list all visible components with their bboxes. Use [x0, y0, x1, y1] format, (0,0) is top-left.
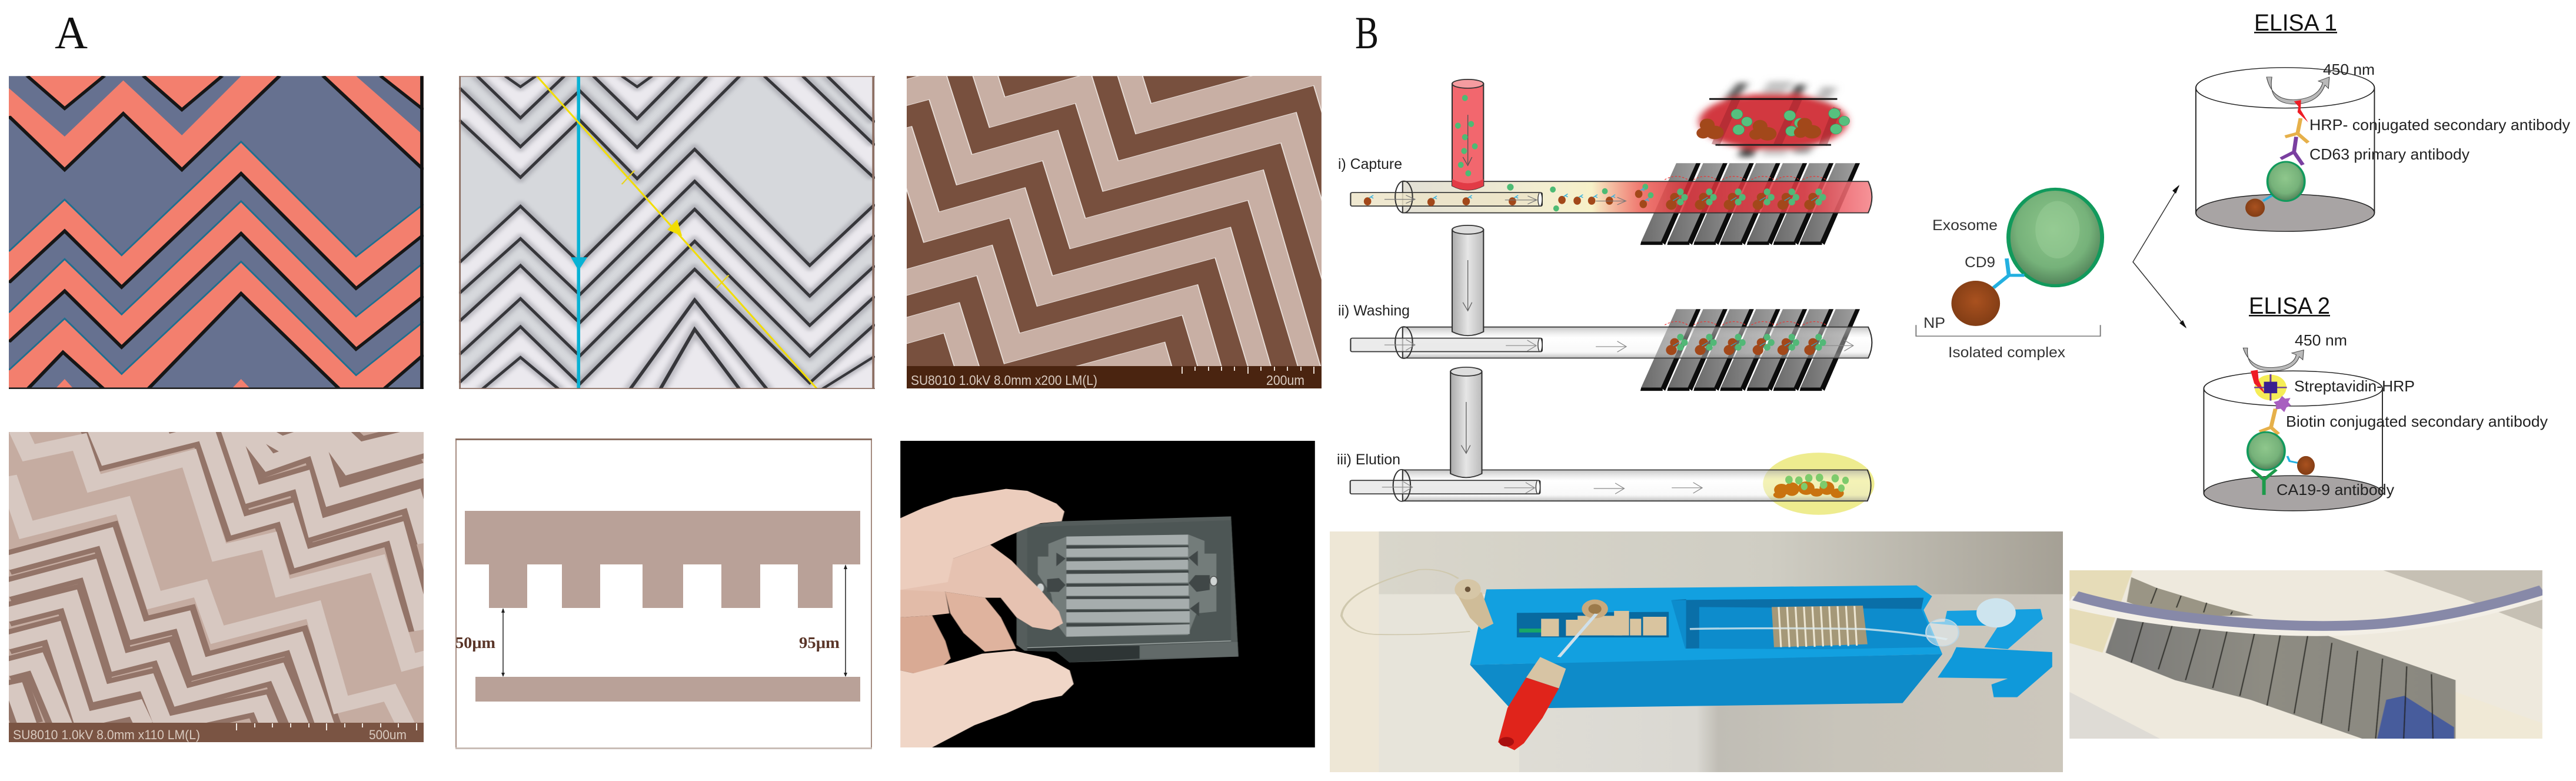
- dimension: 50 micrometre gap: 50μm: [455, 634, 496, 652]
- panel: photo of blue 3D-printed magnet holder: [1330, 531, 2063, 772]
- step labels: iii) Elution: [1337, 451, 1400, 468]
- diagram: ELISA 2 well: 450 nm: [2295, 331, 2347, 349]
- step labels: ii) Washing: [1338, 303, 1410, 319]
- tubing: [2069, 590, 2542, 630]
- panel: coloured optical micrograph of chevrons: [9, 76, 424, 389]
- dimension: 95 micrometre gap: [799, 564, 847, 677]
- heading: ELISA 1: ELISA 1: [2254, 10, 2337, 36]
- lower slab: [475, 677, 860, 702]
- magnet strips: [2106, 577, 2455, 739]
- back fingers: [900, 592, 1016, 673]
- panel: close-up photo of tubing on magnets: [2069, 570, 2542, 739]
- dimension: 50 micrometre gap: [455, 608, 505, 677]
- tubing loop: [1342, 569, 1470, 634]
- arrows: branching to ELISA 1 and ELISA 2: [2133, 185, 2186, 328]
- step labels: i) Capture: [1338, 156, 1402, 172]
- chip: [1017, 516, 1239, 663]
- diagram: isolated exosome complex: Isolated complex: [1948, 344, 2066, 361]
- diagram: ELISA 2 well: [2204, 331, 2548, 511]
- step labels: [1337, 156, 1410, 468]
- holder body: [1470, 586, 1947, 708]
- panel: SEM image of chevron mould, x110: SU8010 1.0kV 8.0mm x110 LM(L): [13, 727, 200, 742]
- panel: SEM image of chevron mould, x110: [6, 426, 427, 742]
- flow line: blue straight path: [571, 76, 587, 389]
- step i: capture tubes: [1350, 79, 1872, 245]
- diagram: ELISA 1 well: 450 nm: [2323, 61, 2375, 78]
- panel: photo of a hand holding the chip: [900, 441, 1315, 747]
- clip and outlet: [1926, 598, 2052, 697]
- diagram: ELISA 1 well: CD63 primary antibody: [2309, 145, 2470, 163]
- thumb: [900, 651, 1073, 747]
- panel: SEM image of chevron mould, x200: [907, 76, 1322, 388]
- panel: greyscale chevron micrograph with flow lines: [459, 76, 876, 389]
- heading: ELISA 2: ELISA 2: [2249, 293, 2330, 319]
- diagram: ELISA 2 well: CA19-9 antibody: [2277, 481, 2394, 498]
- palm and upper finger: [900, 489, 1064, 590]
- diagram: ELISA 1 well: HRP- conjugated secondary antibody: [2309, 116, 2570, 134]
- diagram: ELISA 2 well: Streptavidin-HRP: [2294, 377, 2415, 395]
- dimension: 95 micrometre gap: 95μm: [799, 634, 840, 652]
- diagram: isolated exosome complex: NP: [1923, 315, 1945, 331]
- wall background: [1330, 531, 2063, 772]
- diagram: isolated exosome complex: [1916, 189, 2102, 361]
- panel label B: B: [1355, 7, 1379, 58]
- red connector: [1498, 657, 1566, 750]
- panel: SEM image of chevron mould, x200: 200um: [1266, 373, 1304, 388]
- magnified capture view: [1696, 81, 1850, 157]
- diagram: ELISA 1 well: [2196, 61, 2570, 231]
- upper ridged slab: [465, 511, 860, 608]
- diagram: isolated exosome complex: CD9: [1965, 254, 1995, 271]
- index finger behind glass: [900, 545, 1063, 630]
- schematic: capture, washing and elution steps: [1337, 79, 1875, 515]
- panel: channel cross-section diagram: [455, 438, 872, 749]
- diagram: ELISA 2 well: Biotin conjugated secondary antibody: [2286, 413, 2548, 430]
- step ii: washing tubes: [1350, 225, 1872, 391]
- panel label A: A: [55, 7, 88, 58]
- panel: SEM image of chevron mould, x200: SU8010 1.0kV 8.0mm x200 LM(L): [911, 373, 1097, 388]
- panel: SEM image of chevron mould, x110: 500um: [369, 727, 407, 742]
- diagram: isolated exosome complex: Exosome: [1932, 217, 1998, 234]
- step iii: elution tubes: [1350, 367, 1875, 515]
- inlet knob: [1455, 579, 1493, 630]
- fittings: [1519, 600, 1666, 636]
- flow line: yellow helical path: [537, 76, 817, 389]
